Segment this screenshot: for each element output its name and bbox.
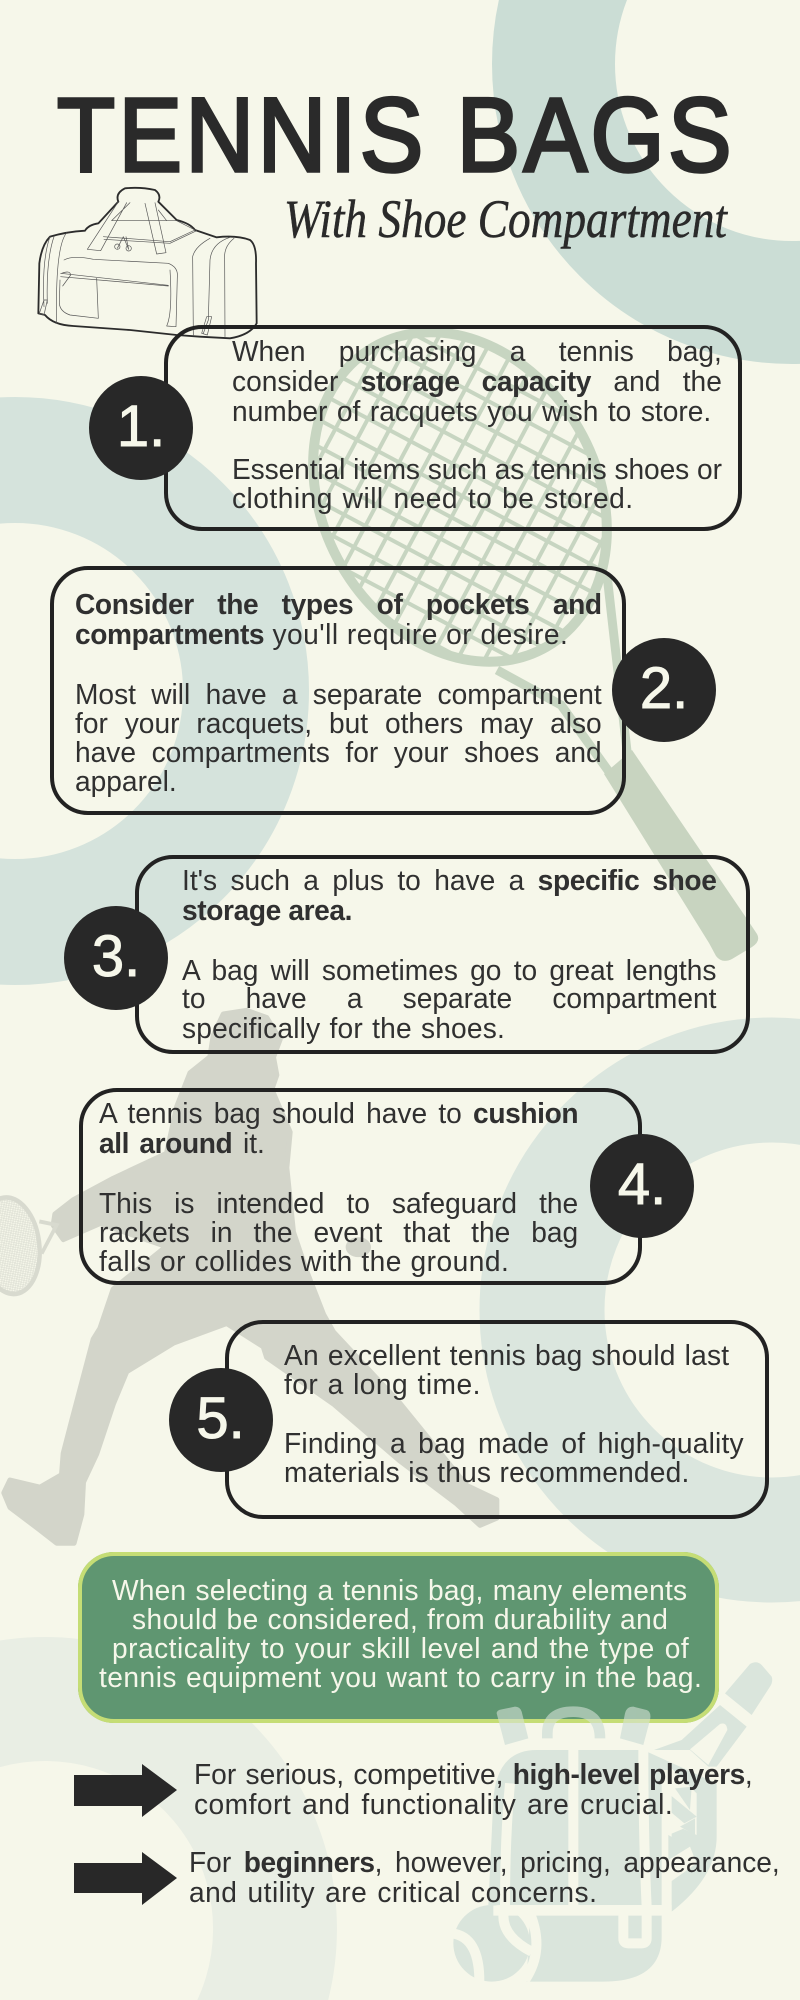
panel: point 4 <box>79 1088 694 1285</box>
panel: point 1: clothing will need to be stored. <box>232 483 634 515</box>
number badge 4 <box>590 1134 694 1238</box>
tip: high-level players <box>74 1759 753 1821</box>
panel: point 2: compartments you'll require or desire. <box>75 619 568 651</box>
ring: right lower <box>542 1080 800 1540</box>
ring: bottom left <box>0 1637 337 2000</box>
title: With Shoe Compartment <box>284 189 729 249</box>
icon: tennis player silhouette <box>0 1011 497 1543</box>
number badge 4: 4. <box>618 1152 666 1217</box>
panel: green summary: tennis equipment you want to carry in the bag. <box>99 1662 702 1694</box>
tip: beginners: For beginners, however, pricing, appearance, <box>189 1847 780 1879</box>
number badge 5: 5. <box>196 1386 245 1451</box>
panel: point 2: apparel. <box>75 766 177 798</box>
panel: green summary <box>78 1552 719 1723</box>
panel: point 5 <box>169 1320 769 1519</box>
panel: point 5: for a long time. <box>284 1369 481 1401</box>
panel: point 1: When purchasing a tennis bag, <box>232 336 722 368</box>
panel: point 4: A tennis bag should have to cushion <box>98 1098 578 1130</box>
panel: point 5: materials is thus recommended. <box>284 1457 689 1489</box>
panel: point 3: A bag will sometimes go to great lengths <box>182 955 716 987</box>
panel: point 3 <box>64 855 750 1054</box>
number badge 1: 1. <box>117 394 165 459</box>
number badge 2 <box>612 638 716 742</box>
tip: beginners <box>74 1847 780 1909</box>
panel: green summary: should be considered, from durability and <box>132 1604 668 1636</box>
number badge 3 <box>64 906 168 1010</box>
panel: green summary: When selecting a tennis bag, many elements <box>112 1575 687 1607</box>
title: TENNIS BAGS <box>57 77 735 194</box>
panel: point 2: Most will have a separate compartment <box>75 679 602 711</box>
tip: high-level players: For serious, competitive, high-level players, <box>194 1759 753 1791</box>
panel: point 4: rackets in the event that the bag <box>98 1217 578 1249</box>
panel: point 1 <box>89 325 742 531</box>
tip: beginners: and utility are critical concerns. <box>189 1877 597 1909</box>
icon: tennis racket <box>255 279 758 961</box>
panel: point 5: An excellent tennis bag should last <box>284 1340 729 1372</box>
number badge 2: 2. <box>640 656 688 721</box>
number badge 5 <box>168 1368 272 1472</box>
ring: top right <box>554 0 800 302</box>
arrow 2 <box>74 1852 177 1905</box>
panel: point 2: for your racquets, but others may also <box>75 708 602 740</box>
icon: tennis backpack <box>452 1662 772 1983</box>
panel: point 3: specifically for the shoes. <box>182 1013 505 1045</box>
panel: green summary: practicality to your skill level and the type of <box>112 1633 689 1665</box>
panel: point 2: Consider the types of pockets and <box>75 589 602 621</box>
panel: point 4: all around it. <box>98 1128 264 1160</box>
ring: left middle <box>0 460 246 922</box>
panel: point 4: falls or collides with the ground. <box>98 1246 509 1278</box>
panel: point 4: This is intended to safeguard the <box>98 1188 578 1220</box>
panel: point 1: consider storage capacity and the <box>232 366 722 398</box>
icon: duffel bag outline <box>38 188 257 338</box>
panel: point 2 <box>50 566 716 815</box>
arrow 1 <box>74 1764 177 1817</box>
panel: point 1: number of racquets you wish to store. <box>232 396 711 428</box>
backpack straps over green panel <box>496 1706 650 1723</box>
panel: point 1: Essential items such as tennis shoes or <box>232 454 722 486</box>
panel: point 3: storage area. <box>182 895 352 927</box>
panel: point 3: to have a separate compartment <box>182 983 716 1015</box>
number badge 3: 3. <box>92 924 140 989</box>
tip: high-level players: comfort and functionality are crucial. <box>194 1789 673 1821</box>
title <box>57 77 735 249</box>
panel: point 2: have compartments for your shoes and <box>75 737 602 769</box>
panel: point 3: It's such a plus to have a specific shoe <box>182 865 716 897</box>
number badge 1 <box>89 376 193 480</box>
panel: point 5: Finding a bag made of high-quality <box>284 1428 744 1460</box>
